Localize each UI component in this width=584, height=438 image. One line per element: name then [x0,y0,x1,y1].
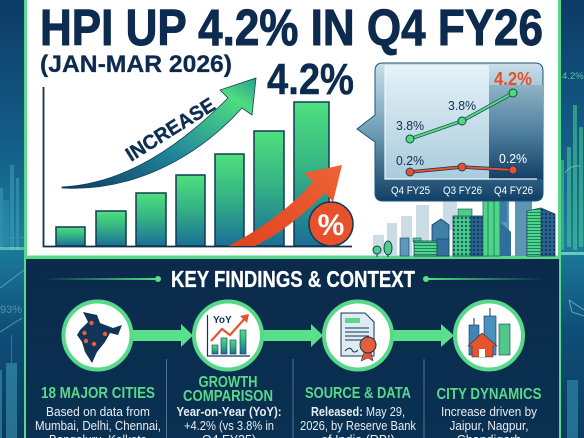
chart axis labels: Q4 FY26 [494,185,533,197]
column: growth comparison: Year-on-Year (YoY): [176,405,282,419]
chart values: 3.8% [448,98,476,113]
icon: certificate [324,302,392,370]
background: right data strip: 4.2% [562,71,584,82]
column: 18 major cities: Mumbai, Delhi, Chennai, [35,419,161,433]
green increase arrow [62,78,256,188]
column: growth comparison: COMPARISON [183,388,273,405]
chart axis labels: Q3 FY26 [443,185,482,197]
green series [406,89,517,143]
column: source and data [300,385,417,438]
column: source and data: 2026, by Reserve Bank [300,419,417,433]
column: growth comparison [176,374,282,438]
background: left data strip [0,0,24,438]
chart values: 4.2% [494,69,532,89]
column: growth comparison: +4.2% (vs 3.8% in [184,419,274,433]
red series [406,163,517,176]
column: city dynamics: Increase driven by [441,405,538,419]
chart axis labels [391,185,533,197]
heading: KEY FINDINGS & CONTEXT [171,266,415,292]
chart values: 0.2% [499,151,527,166]
column: growth comparison: GROWTH [198,374,258,391]
percent badge [309,202,353,246]
dividers [166,359,424,438]
column: city dynamics [436,386,542,438]
chart values: 0.2% [396,153,424,168]
icon: India map [64,302,132,370]
skyline [373,200,555,257]
column: 18 major cities: 18 MAJOR CITIES [41,385,155,402]
column: 18 major cities [35,385,161,438]
bar chart [44,87,352,246]
icon: city and house [455,302,523,370]
panel: white chart area [26,0,560,257]
column: source and data: Released: May 29, [311,405,405,419]
column: city dynamics: CITY DYNAMICS [436,386,542,403]
flow arrows [130,324,454,347]
chart axis labels: Q4 FY25 [391,185,430,197]
background: right data strip [561,0,584,438]
percent badge: % [318,209,344,242]
column: city dynamics: Jaipur, Nagpur, [450,419,528,433]
column: 18 major cities: Based on data from [46,405,150,419]
increase label: INCREASE [122,94,219,166]
big percentage: 4.2% [267,55,354,104]
subtitle: (JAN-MAR 2026) [40,51,232,78]
orange arrow [228,165,342,246]
heading [43,266,543,292]
icon: YoY chart: YoY [213,315,232,326]
column: source and data: SOURCE & DATA [305,385,411,402]
chart values: 3.8% [396,118,424,133]
background: left data strip: 93% [0,304,22,316]
panel: key findings [25,258,560,438]
chart values [396,69,532,168]
callout: line chart [357,63,543,201]
icon: YoY chart [194,302,262,370]
